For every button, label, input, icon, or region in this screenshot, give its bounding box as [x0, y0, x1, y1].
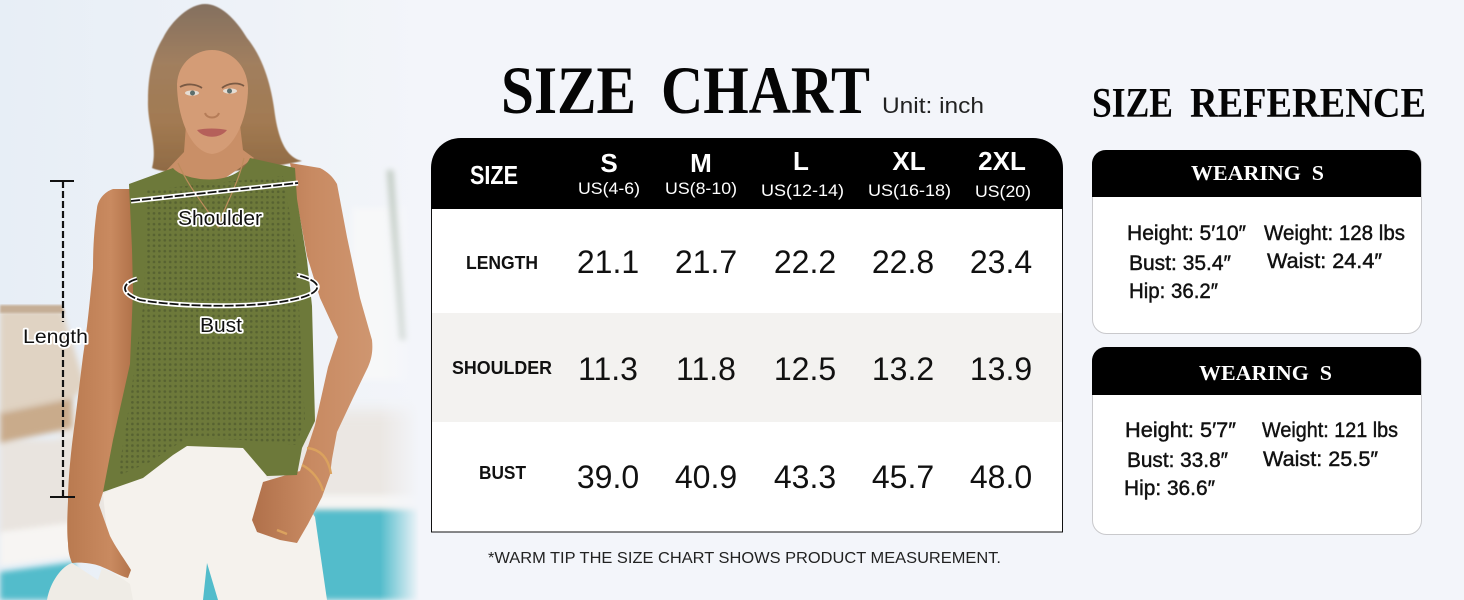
row: shoulder: 11.3 [578, 351, 638, 387]
card measurements: Height: 5′7″ [1125, 419, 1237, 442]
hair back [148, 4, 302, 173]
row: length: 23.4 [970, 244, 1032, 280]
card measurements [1127, 222, 1405, 303]
measure: length bracket [50, 181, 75, 497]
measure: shoulder line [131, 183, 298, 201]
card header: WEARING S [1199, 361, 1332, 385]
table header row: S [600, 148, 618, 178]
card measurements: Waist: 24.4″ [1267, 250, 1383, 273]
photo backdrop: blurred poolside scene [0, 0, 425, 600]
clutch bag [47, 563, 133, 600]
footnote: *WARM TIP THE SIZE CHART SHOWS PRODUCT MEASUREMENT. [488, 550, 1001, 567]
row: length: 22.2 [774, 244, 836, 280]
card header: WEARING S [1191, 161, 1324, 185]
row: length: 21.7 [675, 244, 737, 280]
label: Length: Length [23, 327, 88, 348]
table header row: XL [892, 146, 926, 176]
card: model 2 reference [1092, 347, 1422, 534]
table header row: US(4-6) [578, 179, 640, 198]
heading: SIZE REFERENCE: REFERENCE [1190, 81, 1426, 127]
card header [1092, 347, 1421, 395]
heading: SIZE REFERENCE: SIZE [1092, 81, 1173, 127]
row: bust: BUST [479, 463, 526, 483]
table header row [431, 138, 1063, 209]
row: bust: 40.9 [675, 459, 737, 495]
label: Bust: Bust [200, 315, 242, 337]
table header row: US(12-14) [761, 181, 844, 200]
row: shoulder: 13.9 [970, 351, 1032, 387]
face [177, 50, 248, 154]
card measurements: Waist: 25.5″ [1263, 448, 1379, 471]
heading: SIZE REFERENCE [1092, 81, 1426, 127]
row: shoulder: SHOULDER [452, 358, 552, 378]
table header row: L [793, 146, 809, 176]
size table [431, 138, 1063, 532]
row: length: 22.8 [872, 244, 934, 280]
row: shoulder: 11.8 [676, 351, 736, 387]
row: bust: 43.3 [774, 459, 836, 495]
row: length [466, 244, 1032, 280]
photo right-edge fade [382, 170, 425, 600]
row: bust: 39.0 [577, 459, 639, 495]
card: model 1 reference [1092, 150, 1422, 334]
table header row: US(16-18) [868, 181, 951, 200]
table body rows [432, 170, 1062, 532]
card measurements: Height: 5′10″ [1127, 222, 1247, 245]
neck [166, 127, 254, 180]
left arm and hand [67, 189, 140, 578]
card measurements [1124, 419, 1398, 500]
title: SIZE CHART: CHART [661, 52, 870, 128]
table header row: 2XL [978, 146, 1026, 176]
measure: bust curve [125, 275, 317, 306]
tank top [100, 150, 320, 492]
row: bust: 48.0 [970, 459, 1032, 495]
photo: model wearing olive knit tank top [0, 0, 426, 600]
row: bust [479, 459, 1032, 495]
card measurements: Bust: 35.4″ [1129, 252, 1232, 275]
necklace [178, 158, 244, 227]
title: SIZE CHART [501, 52, 870, 128]
card header [1092, 150, 1421, 197]
label: Shoulder: Shoulder [178, 208, 262, 230]
row: length: 21.1 [577, 244, 639, 280]
bracelets and ring [277, 448, 331, 534]
card measurements: Hip: 36.6″ [1124, 477, 1216, 500]
right arm and hand [252, 163, 372, 543]
row: shoulder: 12.5 [774, 351, 836, 387]
row: shoulder [452, 351, 1032, 387]
unit note: Unit: inch [882, 93, 984, 118]
table header row: SIZE [470, 160, 518, 190]
card measurements: Weight: 121 lbs [1262, 419, 1398, 442]
row: length: LENGTH [466, 253, 538, 273]
card measurements: Weight: 128 lbs [1264, 222, 1405, 245]
table header row: US(8-10) [665, 179, 737, 198]
card measurements: Hip: 36.2″ [1129, 280, 1219, 303]
white pants [103, 442, 327, 600]
row: shoulder: 13.2 [872, 351, 934, 387]
card measurements: Bust: 33.8″ [1127, 449, 1229, 472]
table header row: US(20) [975, 182, 1031, 201]
row: bust: 45.7 [872, 459, 934, 495]
table header row: M [690, 148, 712, 178]
title: SIZE CHART: SIZE [501, 52, 636, 128]
